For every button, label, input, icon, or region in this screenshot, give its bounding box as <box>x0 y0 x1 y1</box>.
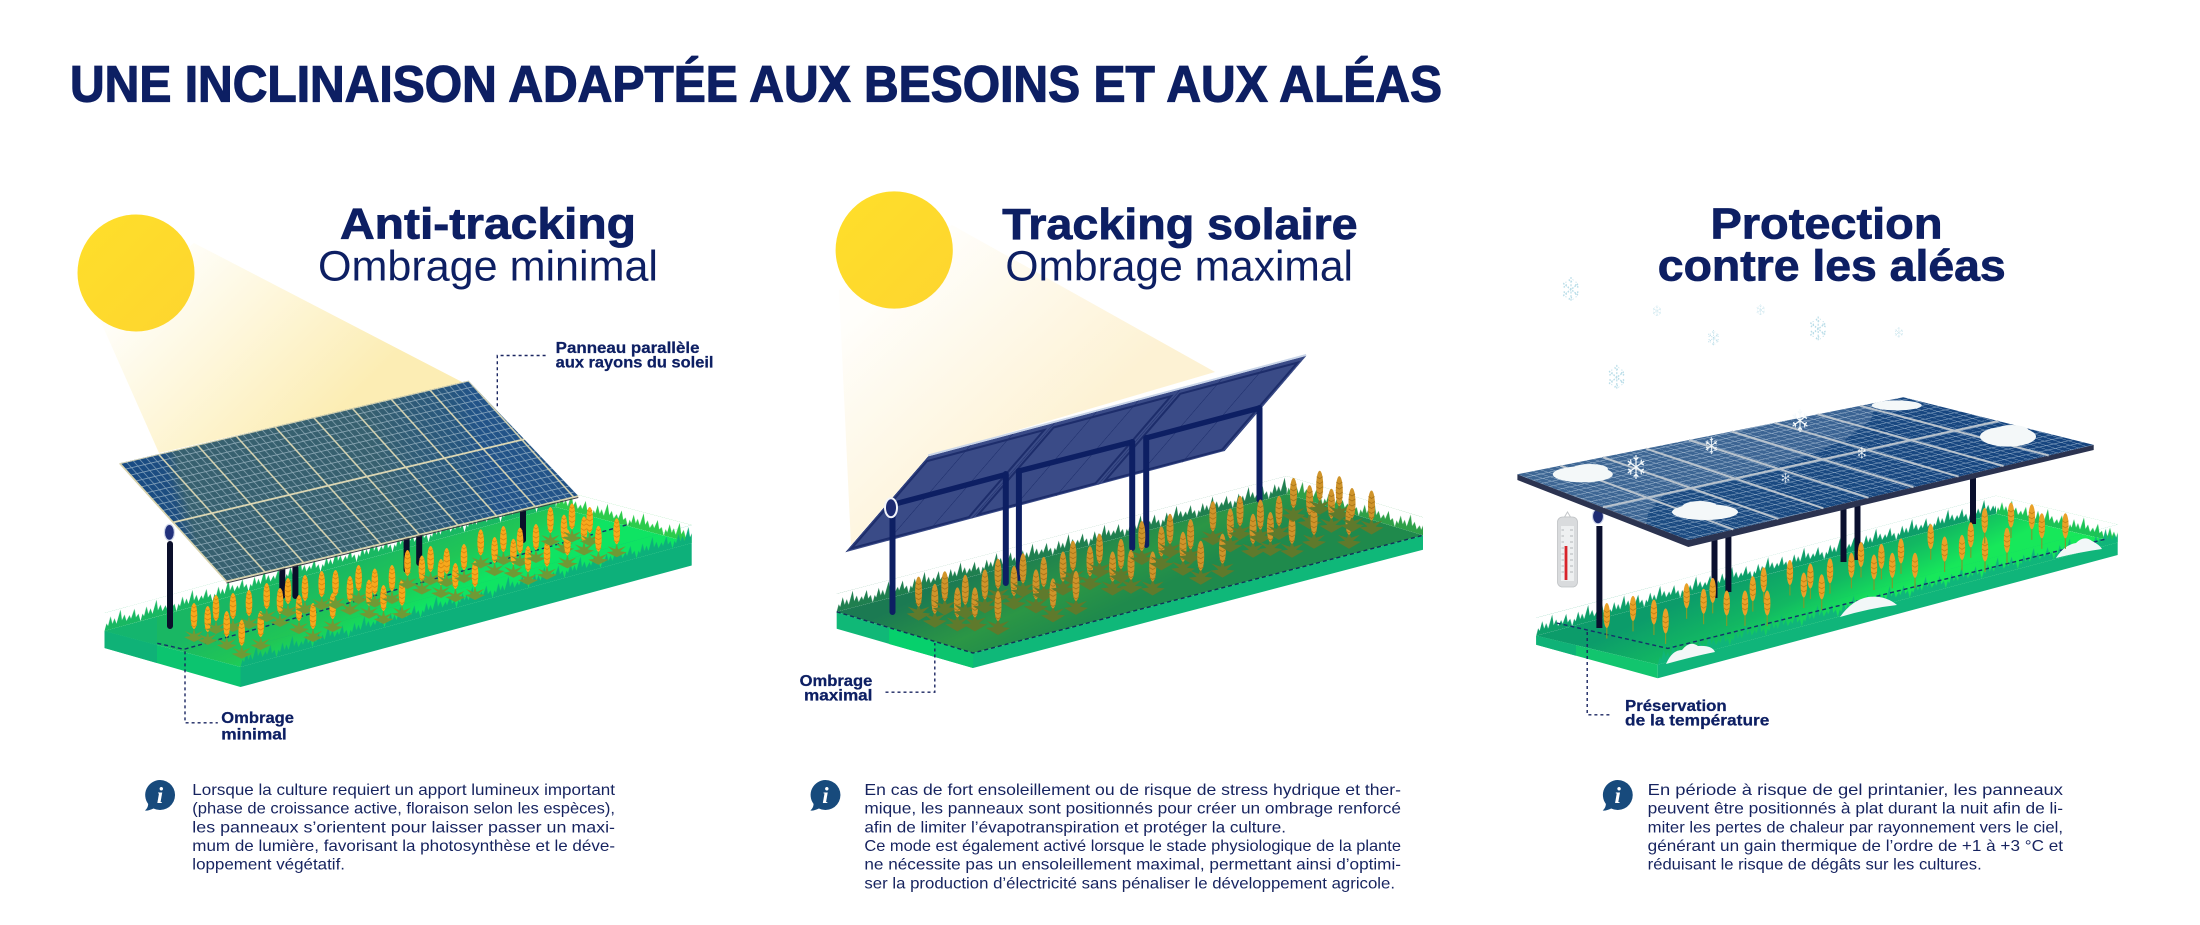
icon: sun <box>836 191 953 309</box>
heading: protection: Protection <box>1710 200 1942 248</box>
icon: sun <box>78 214 194 332</box>
text block: protection: miter les pertes de chaleur par rayonnement vers le ciel, <box>1648 819 2063 836</box>
callout: préservation de la température: de la température <box>1625 713 1770 730</box>
post hub <box>885 498 897 517</box>
ground plot <box>104 489 692 687</box>
text block: tracking solaire: ne nécessite pas un ensoleillement maximal, permettant ainsi d’optimi- <box>864 857 1401 874</box>
wheat crop <box>184 503 627 659</box>
callout: panneau parallèle: Panneau parallèle <box>556 340 700 357</box>
solar panel <box>1517 397 2094 547</box>
text block: anti-tracking <box>192 782 616 874</box>
text block: tracking solaire: afin de limiter l’évapotranspiration et protéger la culture. <box>864 819 1286 836</box>
falling snowflakes <box>1563 277 1903 390</box>
support posts <box>170 511 523 626</box>
support posts <box>1599 476 1973 628</box>
panel snow <box>1553 400 2036 520</box>
icon: info <box>810 780 840 811</box>
heading: tracking solaire: Ombrage maximal <box>1005 242 1353 290</box>
shade boundary <box>157 524 630 649</box>
solar panel <box>120 381 578 583</box>
callout: ombrage maximal <box>800 643 935 704</box>
icon: info <box>1603 780 1633 811</box>
heading: protection <box>1658 200 2006 290</box>
callout: panneau parallèle <box>497 340 714 407</box>
text block: protection: peuvent être positionnés à plat durant la nuit afin de li- <box>1648 801 2063 818</box>
icon: info <box>145 780 175 811</box>
text block: protection: générant un gain thermique de l’ordre de +1 à +3 °C et <box>1648 838 2064 855</box>
text block: anti-tracking: loppement végétatif. <box>192 857 345 874</box>
icon: info: i <box>157 783 164 808</box>
icon: info: i <box>822 783 829 808</box>
panel snowflakes <box>1628 409 1866 484</box>
text block: tracking solaire: ser la production d’électricité sans pénaliser le développement agricole. <box>864 875 1395 892</box>
panel: anti-tracking <box>78 200 714 874</box>
text block: anti-tracking: mum de lumière, favorisant la photosynthèse et le déve- <box>192 838 615 855</box>
callout: ombrage maximal: maximal <box>804 688 872 704</box>
text block: protection <box>1648 782 2064 874</box>
callout: ombrage minimal <box>185 651 294 744</box>
heading: anti-tracking: Ombrage minimal <box>318 242 658 290</box>
callout: préservation de la température: Préservation <box>1625 698 1727 715</box>
heading: anti-tracking <box>318 200 658 290</box>
callout: panneau parallèle: aux rayons du soleil <box>556 355 714 372</box>
text block: anti-tracking: Lorsque la culture requiert un apport lumineux important <box>192 782 616 799</box>
callout: ombrage maximal: Ombrage <box>800 673 873 690</box>
icon: info: i <box>1615 783 1622 808</box>
wheat crop <box>1604 502 2069 644</box>
text block: tracking solaire <box>864 782 1401 892</box>
heading: tracking solaire: Tracking solaire <box>1002 200 1358 249</box>
support posts <box>892 408 1260 612</box>
post hub <box>164 524 174 540</box>
rail <box>891 408 1260 505</box>
ground plot <box>1536 496 2118 678</box>
text block: tracking solaire: En cas de fort ensoleillement ou de risque de stress hydrique et ther- <box>864 782 1401 799</box>
icon: thermometer <box>1558 512 1578 587</box>
title: UNE INCLINAISON ADAPTÉE AUX BESOINS ET AUX ALÉAS <box>70 56 1442 112</box>
heading: anti-tracking: Anti-tracking <box>340 200 636 249</box>
callout: ombrage minimal: Ombrage <box>221 710 294 727</box>
panel: protection contre les aléas <box>1517 200 2118 874</box>
ground snow <box>1666 538 2102 664</box>
callout: ombrage minimal: minimal <box>221 726 287 744</box>
light beam <box>839 225 1215 545</box>
ground plot <box>837 476 1423 668</box>
text block: tracking solaire: mique, les panneaux sont positionnés pour créer un ombrage renforcé <box>864 801 1401 818</box>
callout: préservation de la température <box>1587 632 1770 730</box>
wheat crop <box>907 471 1384 635</box>
text block: anti-tracking: (phase de croissance active, floraison selon les espèces), <box>192 801 615 818</box>
panel: tracking solaire <box>800 191 1423 892</box>
text block: protection: réduisant le risque de dégâts sur les cultures. <box>1648 857 1982 874</box>
text block: tracking solaire: Ce mode est également activé lorsque le stade physiologique de la plante <box>864 838 1401 855</box>
text block: anti-tracking: les panneaux s’orientent pour laisser passer un maxi- <box>192 819 615 836</box>
post hub <box>1592 509 1604 524</box>
heading: protection: contre les aléas <box>1658 242 2006 290</box>
light beam <box>100 243 464 453</box>
heading: tracking solaire <box>1002 200 1358 290</box>
solar panel rear <box>845 355 1306 552</box>
text block: protection: En période à risque de gel printanier, les panneaux <box>1648 782 2063 799</box>
